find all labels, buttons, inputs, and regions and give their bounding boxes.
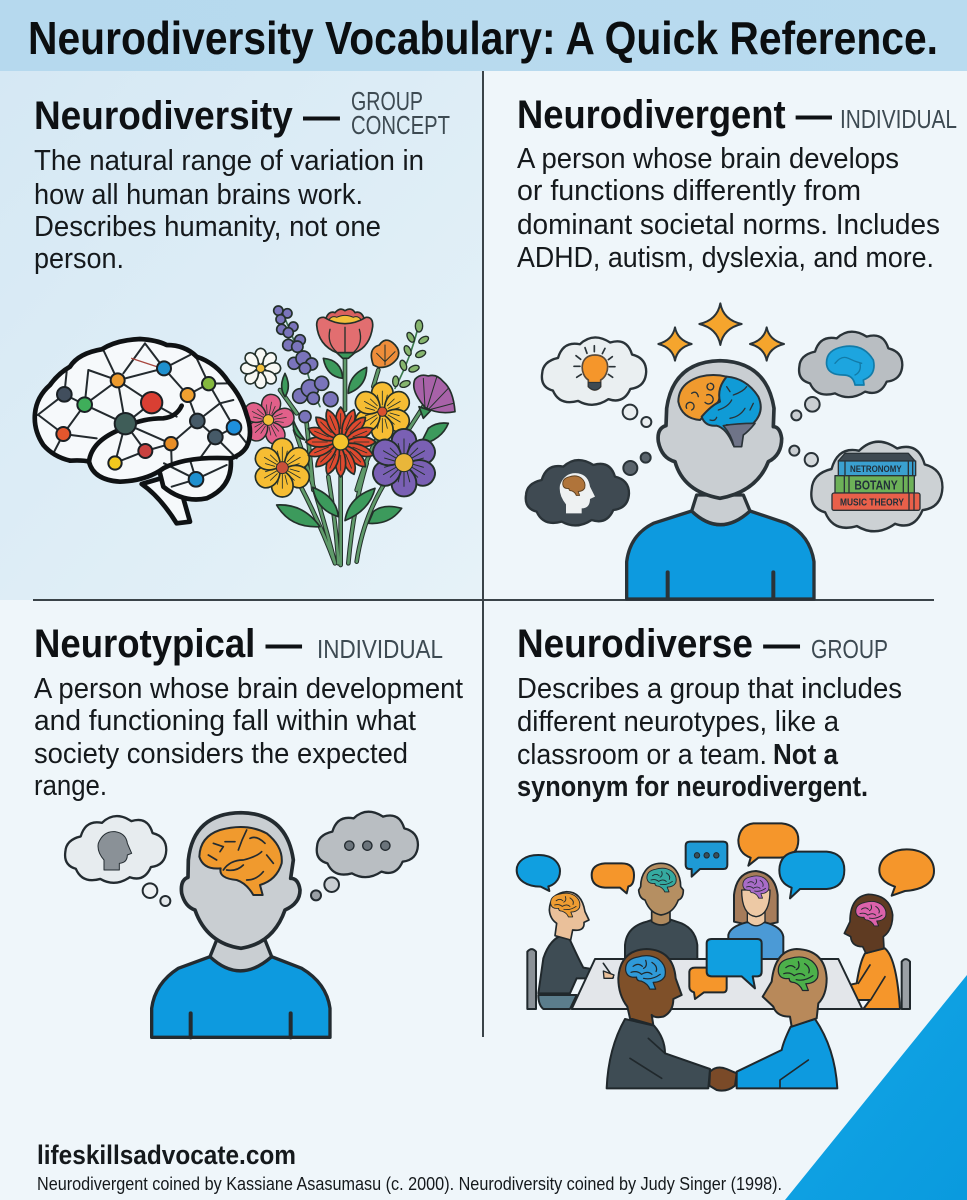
tag: individual: INDIVIDUAL [317,634,443,664]
yellow flower right [352,382,413,441]
definition text: A person whose brain develops [517,143,899,175]
corner triangle accent [785,975,967,1200]
fan purple flower [414,375,455,418]
heading: Neurotypical: Neurotypical — [34,622,302,666]
tag: group: GROUP [811,634,888,664]
definition text [517,673,902,803]
purple flower [369,429,439,496]
table speech bubbles [689,939,762,999]
definition text: different neurotypes, like a [517,706,839,738]
person: front right [737,949,837,1088]
definition text: range. [34,770,107,802]
person figure [152,813,330,1037]
white daisy [241,348,281,388]
thought cloud: head silhouette [65,816,166,883]
thought cloud: lightbulb [542,337,646,405]
person: back left [527,892,605,1009]
definition text: and functioning fall within what [34,705,416,737]
illustration: diverse group around table [517,823,934,1091]
person: right [822,894,910,1009]
speech bubbles [517,823,934,898]
definition text: or functions differently from [517,175,861,207]
panel: Neurodivergent [517,93,957,599]
definition text: Describes a group that includes [517,673,902,705]
book label: MUSIC THEORY [840,498,904,509]
table [572,959,862,1009]
header band [0,0,967,71]
definition text: person. [34,243,124,275]
panel: Neurotypical [34,622,463,1037]
definition text: synonym for neurodivergent. [517,771,868,803]
illustration: brain network and flower bouquet [35,306,455,565]
person: back centre [625,863,697,959]
lavender [274,306,338,423]
thought bubble dots [623,397,820,475]
heading: Neurodivergent: Neurodivergent — [517,93,832,137]
yellow flower left [252,438,313,497]
person figure [627,361,814,599]
thought cloud: books [811,442,942,531]
definition text: society considers the expected [34,738,408,770]
definition text: dominant societal norms. Includes [517,209,940,241]
icon: network brain [35,339,250,523]
icon: flower bouquet [237,306,455,565]
thought cloud: head icon [526,460,629,525]
footer: website: lifeskillsadvocate.com [37,1140,296,1170]
person: back woman [728,871,783,959]
illustration: neurodivergent person with thoughts [526,303,942,599]
definition text: how all human brains work. [34,179,363,211]
tag: group concept: CONCEPT [351,110,450,140]
thought bubble dots [143,877,339,906]
footer: attribution note: Neurodivergent coined by Kassiane Asasumasu (c. 2000). Neurodiversity coined by Judy Singer (1998). [37,1174,782,1194]
book label: NETRONOMY [850,464,902,474]
definition text: classroom or a team. [517,739,767,771]
tulip flower [317,309,373,358]
orange flower [371,340,399,367]
pink flower [237,390,300,451]
definition text: The natural range of variation in [34,145,424,177]
thought cloud: blue brain [799,332,902,397]
sprig [393,320,430,389]
definition text: Describes humanity, not one [34,211,381,243]
heading: Neurodiversity: Neurodiversity — [34,94,340,138]
definition text: ADHD, autism, dyslexia, and more. [517,242,934,274]
book label: BOTANY [854,479,898,493]
icon: orange brain [199,827,282,895]
handshake [709,1067,737,1091]
tag: group concept: GROUP [351,86,423,116]
panel: Neurodiverse [517,622,934,1091]
definition text: A person whose brain development [34,673,463,705]
heading: Neurodiverse: Neurodiverse — [517,622,800,666]
person: front left [607,949,710,1088]
pen and hand [603,963,613,978]
red daisy [306,407,376,477]
icon: split brain [678,375,761,447]
icon: sparkles [658,303,784,361]
thought cloud: ellipsis [317,812,418,877]
panel: Neurodiversity [34,86,455,565]
illustration: neurotypical person with thoughts [65,812,418,1037]
definition text: Not a [773,739,839,771]
